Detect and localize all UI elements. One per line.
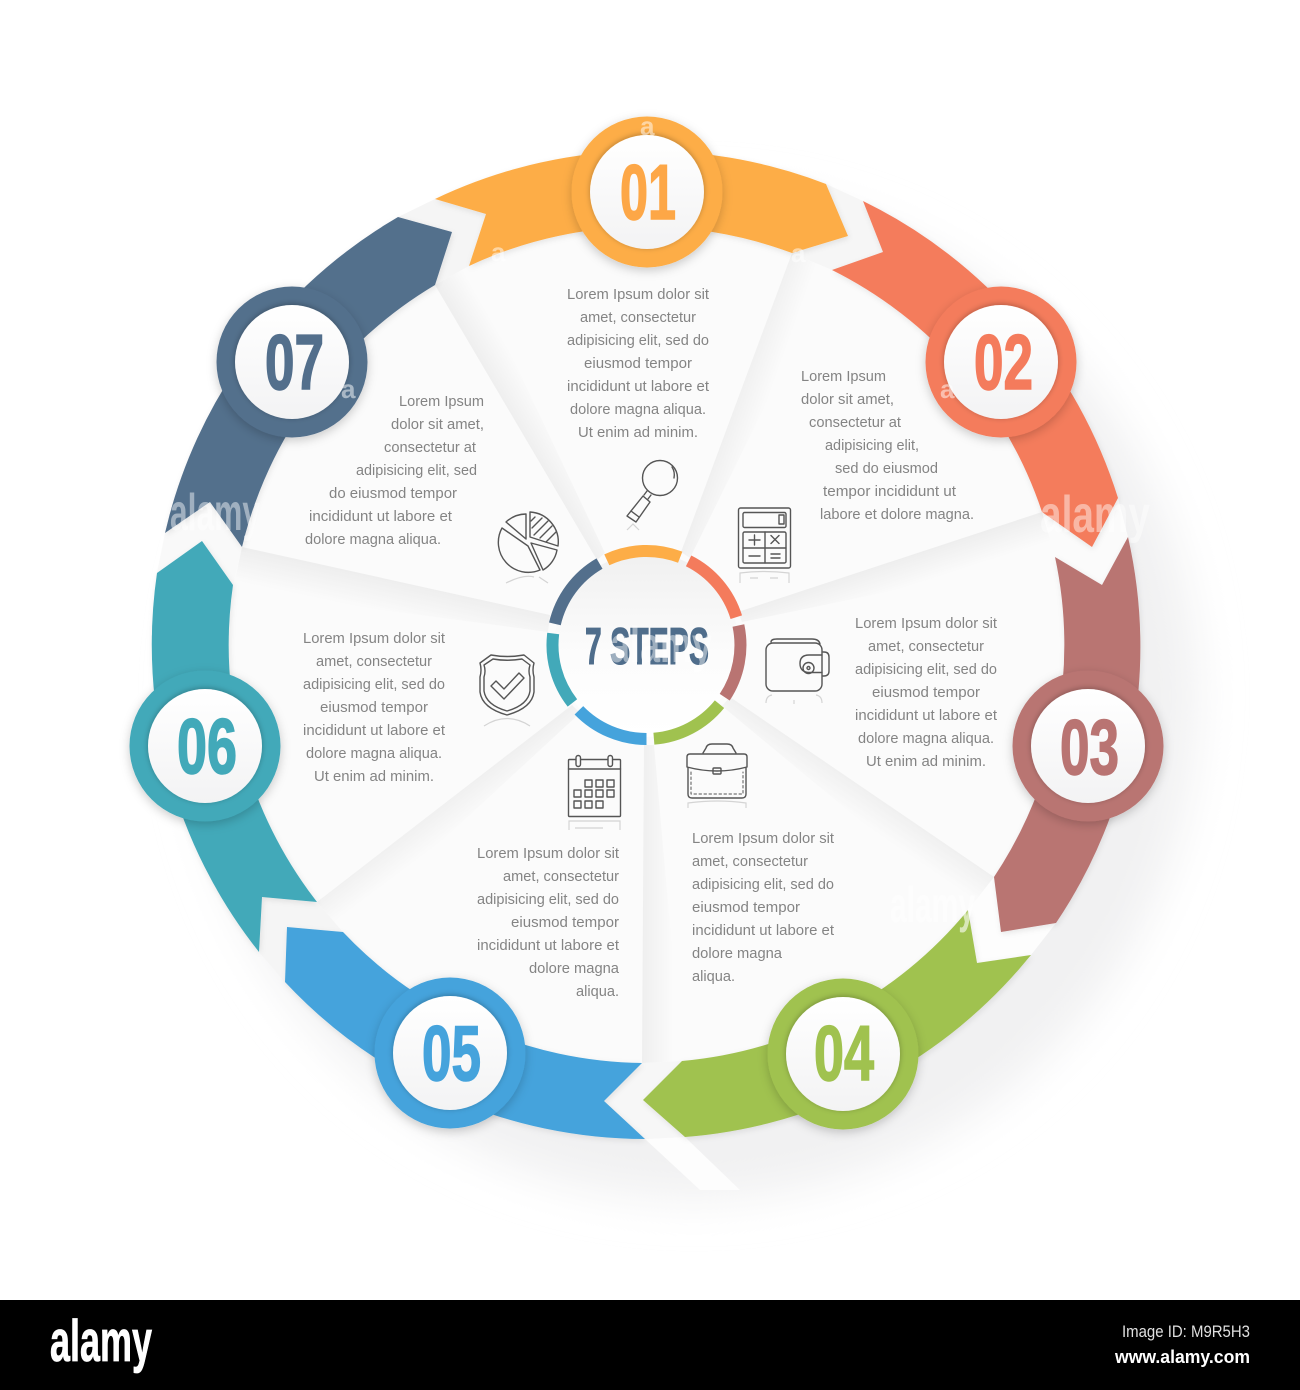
icon: calendar: [568, 756, 620, 830]
badge 02: [926, 286, 1076, 438]
text block 1: incididunt ut labore et: [567, 378, 710, 395]
badge 01: 01: [620, 148, 676, 236]
badge 05: 05: [422, 1009, 481, 1097]
text block 4: Lorem Ipsum dolor sit: [692, 830, 835, 847]
long shadow behind the ring: [191, 193, 1197, 1199]
text block 2: labore et dolore magna.: [820, 506, 974, 523]
footer logo: alamy: [50, 1309, 152, 1374]
text block 1: eiusmod tempor: [584, 355, 692, 372]
footer url: www.alamy.com: [1114, 1347, 1250, 1367]
badge 03: 03: [1060, 703, 1119, 791]
watermark text: alamy: [890, 877, 975, 933]
text block 7: dolore magna aliqua.: [305, 531, 441, 548]
arrow 1 orange: [435, 151, 848, 266]
text block 1: amet, consectetur: [580, 309, 696, 326]
text block 3: Lorem Ipsum dolor sit: [855, 615, 998, 632]
centre disc: [554, 553, 738, 737]
text block 5: incididunt ut labore et: [477, 937, 620, 954]
text block 6: [303, 630, 446, 785]
arrow 4 green: [643, 910, 1031, 1137]
badge 07: 07: [265, 318, 324, 406]
icon: pie chart: [498, 512, 558, 583]
radial dividers between the panels: [233, 253, 1055, 1063]
text block 5: eiusmod tempor: [511, 914, 619, 931]
icon: briefcase: [687, 744, 747, 808]
text block 1: dolore magna aliqua.: [570, 401, 706, 418]
text block 6: dolore magna aliqua.: [306, 745, 442, 762]
text block 5: aliqua.: [576, 983, 619, 1000]
text block 7: adipisicing elit, sed: [356, 462, 477, 479]
text block 5: adipisicing elit, sed do: [477, 891, 619, 908]
arrow 3 rose: [994, 537, 1140, 932]
text block 4: incididunt ut labore et: [692, 922, 835, 939]
watermark text: a: [940, 374, 955, 404]
watermark text: [170, 111, 1150, 933]
text block 1: Ut enim ad minim.: [578, 424, 698, 441]
text block 7: [305, 393, 484, 548]
text block 6: eiusmod tempor: [320, 699, 428, 716]
badge 07: [216, 286, 368, 438]
watermark text: alamy: [170, 484, 260, 542]
text block 7: do eiusmod tempor: [329, 485, 457, 502]
text block 3: eiusmod tempor: [872, 684, 980, 701]
watermark text: alamy: [1040, 486, 1150, 544]
text block 2: adipisicing elit,: [825, 437, 919, 454]
text block 5: dolore magna: [529, 960, 620, 977]
text block 2: sed do eiusmod: [835, 460, 938, 477]
arrow 6 teal: [152, 541, 317, 952]
text block 5: [477, 845, 620, 1000]
watermark text: a: [640, 111, 655, 141]
text block 4: eiusmod tempor: [692, 899, 800, 916]
text block 3: incididunt ut labore et: [855, 707, 998, 724]
disc of inner panels: [190, 190, 1102, 1102]
icon: shield: [480, 655, 534, 726]
text block 2: Lorem Ipsum: [801, 368, 886, 385]
gaps between the ring arrows: [157, 184, 1128, 1190]
text block 4: dolore magna: [692, 945, 783, 962]
text block 2: [801, 368, 974, 523]
badge 06: 06: [177, 702, 237, 790]
text block 6: incididunt ut labore et: [303, 722, 446, 739]
badge 04: [768, 978, 918, 1130]
arrow 2 coral: [832, 201, 1118, 547]
arrow ring: [152, 151, 1140, 1139]
badge 06: [130, 670, 280, 822]
text block 3: adipisicing elit, sed do: [855, 661, 997, 678]
text block 7: Lorem Ipsum: [399, 393, 484, 410]
watermark text: a: [341, 374, 356, 404]
text block 6: amet, consectetur: [316, 653, 432, 670]
text block 7: consectetur at: [384, 439, 477, 456]
text block 3: amet, consectetur: [868, 638, 984, 655]
footer bar: [0, 1300, 1300, 1390]
text block 7: dolor sit amet,: [391, 416, 484, 433]
text block 3: dolore magna aliqua.: [858, 730, 994, 747]
text block 4: [692, 830, 835, 985]
text block 2: dolor sit amet,: [801, 391, 894, 408]
text block 5: Lorem Ipsum dolor sit: [477, 845, 620, 862]
text block 4: aliqua.: [692, 968, 735, 985]
text block 6: Ut enim ad minim.: [314, 768, 434, 785]
footer image id: Image ID: M9R5H3: [1122, 1322, 1250, 1341]
icon: wallet: [766, 639, 829, 704]
text block 1: Lorem Ipsum dolor sit: [567, 286, 710, 303]
arrow 7 slate: [165, 217, 452, 547]
text block 2: consectetur at: [809, 414, 902, 431]
text block 3: [855, 615, 998, 770]
text block 2: tempor incididunt ut: [823, 483, 957, 500]
text block 4: adipisicing elit, sed do: [692, 876, 834, 893]
text block 1: [567, 286, 710, 441]
watermark text: alamy: [610, 617, 712, 673]
text block 1: adipisicing elit, sed do: [567, 332, 709, 349]
text block 6: Lorem Ipsum dolor sit: [303, 630, 446, 647]
text block 5: amet, consectetur: [503, 868, 619, 885]
watermark text: a: [791, 238, 806, 268]
badge 01: [572, 116, 722, 268]
text block 3: Ut enim ad minim.: [866, 753, 986, 770]
watermark text: a: [491, 237, 506, 267]
text block 4: amet, consectetur: [692, 853, 808, 870]
badge 05: [374, 978, 526, 1128]
icon: magnifier: [627, 460, 678, 530]
arrow 5 blue: [285, 927, 645, 1139]
text block 6: adipisicing elit, sed do: [303, 676, 445, 693]
badge 04: 04: [814, 1009, 874, 1097]
badge 02: 02: [974, 318, 1033, 406]
centre segmented ring: [552, 551, 740, 739]
centre title: 7 STEPS: [585, 618, 709, 676]
badge 03: [1012, 670, 1164, 822]
text block 7: incididunt ut labore et: [309, 508, 453, 525]
icon: calculator: [738, 508, 790, 583]
